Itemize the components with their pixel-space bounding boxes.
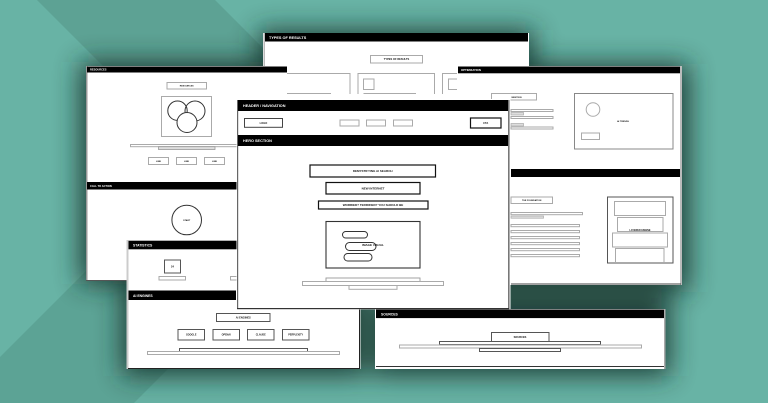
heading: header navigation — [238, 100, 508, 111]
heading: sources — [376, 310, 664, 318]
panel drop shadows — [80, 30, 689, 376]
heading: resources — [87, 66, 287, 72]
panel: types of results — [263, 33, 529, 104]
image placeholder — [574, 94, 673, 149]
panel: optimization — [457, 66, 682, 285]
navigation links — [340, 120, 412, 126]
engine buttons: GOOGLE — [186, 334, 197, 337]
logo box: LOGO — [260, 121, 267, 125]
engine buttons — [178, 330, 309, 340]
heading: types of results: TYPES OF RESULTS — [269, 36, 307, 40]
CTA button — [470, 118, 501, 128]
heading: call to action — [87, 182, 237, 190]
image placeholder: AI TRENDS — [617, 120, 629, 123]
engine buttons: PERPLEXITY — [288, 334, 304, 337]
tagline box: WORRIED? TERRIFIED? YOU SHOULD BE — [343, 203, 403, 207]
label box: sources: SOURCES — [514, 335, 527, 339]
text lines — [511, 212, 582, 257]
tagline box — [318, 201, 428, 209]
subheadline box — [326, 182, 420, 194]
label box: resources: RESOURCES — [180, 86, 194, 88]
label box: types of results — [370, 56, 422, 63]
heading: optimization: OPTIMIZATION — [461, 68, 481, 72]
text bars — [130, 144, 240, 150]
heading: call to action: CALL TO ACTION — [90, 184, 112, 188]
layered stack diagram — [608, 197, 673, 263]
label box: mention — [492, 94, 536, 100]
heading: hero section: HERO SECTION — [243, 139, 272, 143]
heading: AI engines: AI ENGINES — [133, 294, 153, 298]
stat bars — [159, 276, 238, 280]
panel: statistics and AI engines — [126, 240, 360, 369]
heading: resources: RESOURCES — [90, 68, 107, 72]
CTA button: CTA — [483, 121, 488, 125]
headline box: DEMYSTIFYING AI SEARCH — [353, 169, 393, 173]
venn diagram — [162, 96, 212, 136]
call to action circle: START — [183, 219, 191, 222]
label box: AI engines — [216, 314, 270, 322]
heading: sources: SOURCES — [381, 312, 399, 316]
text bars — [511, 110, 553, 129]
layered stack diagram: LAYERED ENGINE — [629, 229, 651, 232]
heading: statistics: STATISTICS — [133, 243, 153, 247]
panel: main hero wireframe — [236, 99, 510, 310]
label box: AI engines: AI ENGINES — [236, 315, 251, 319]
stat box: 24 — [171, 265, 174, 269]
label box: the foundation: THE FOUNDATION — [522, 199, 542, 202]
subheadline box: NEW INTERNET — [362, 186, 385, 190]
heading: AI engines — [128, 290, 236, 300]
label box: sources — [492, 332, 549, 342]
link buttons: LINK — [156, 161, 161, 163]
link buttons: LINK — [212, 161, 217, 163]
link buttons: LINK — [184, 161, 189, 163]
heading: header navigation: HEADER / NAVIGATION — [243, 104, 286, 108]
heading: statistics — [128, 241, 236, 249]
text bars — [302, 278, 444, 289]
panel: resources — [86, 66, 287, 281]
logo box — [244, 118, 282, 127]
heading: optimization — [458, 66, 680, 73]
engine buttons: OPENAI — [222, 334, 231, 337]
heading: hero section — [238, 135, 508, 146]
panel: sources — [375, 309, 666, 369]
headline box — [310, 165, 436, 177]
stat box — [164, 260, 180, 273]
heading: second section — [511, 169, 680, 177]
label box: mention: MENTION — [512, 97, 522, 99]
text bars — [148, 348, 340, 354]
link buttons — [148, 158, 224, 164]
heading: types of results — [265, 33, 528, 42]
engine buttons: CLAUDE — [256, 334, 266, 337]
call to action circle — [172, 205, 202, 235]
label box: the foundation — [511, 197, 552, 204]
text bars — [400, 342, 642, 352]
result cards — [287, 73, 457, 94]
image visual — [326, 222, 420, 268]
label box: types of results: TYPES OF RESULTS — [384, 57, 409, 61]
image visual: IMAGE VISUAL — [362, 243, 384, 247]
label box: resources — [167, 82, 206, 89]
